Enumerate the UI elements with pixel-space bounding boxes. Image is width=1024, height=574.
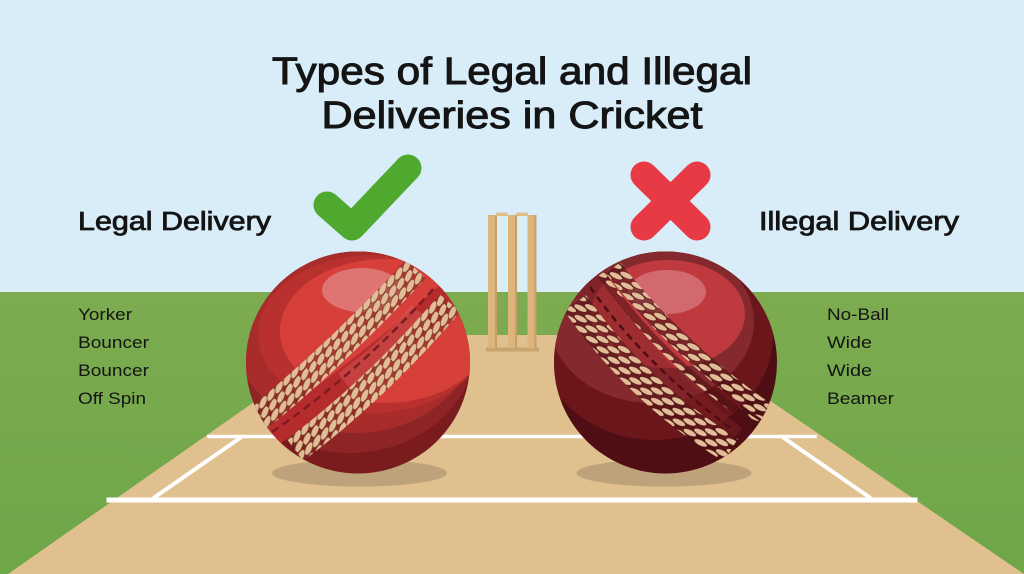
title (272, 51, 752, 137)
list: legal deliveries: Bouncer (78, 333, 149, 352)
ball highlight (322, 268, 402, 312)
seam stitching (259, 269, 416, 418)
icon: red cross (644, 175, 697, 227)
sky background (0, 0, 1024, 293)
list: illegal deliveries: No-Ball (827, 305, 889, 324)
shadow: legal ball (272, 460, 447, 486)
heading: illegal delivery: Illegal Delivery (759, 208, 959, 236)
list: illegal deliveries (827, 305, 894, 408)
icon: green check mark (327, 168, 408, 227)
heading: legal delivery: Legal Delivery (78, 208, 271, 236)
seam stitching (613, 268, 767, 412)
list: legal deliveries (78, 305, 149, 408)
centre seam (268, 286, 458, 436)
list: legal deliveries: Bouncer (78, 361, 149, 380)
list: legal deliveries: Off Spin (78, 389, 146, 408)
title: Deliveries in Cricket (322, 95, 703, 137)
list: legal deliveries: Yorker (78, 305, 132, 324)
title: Types of Legal and Illegal (272, 51, 752, 93)
crease lines (109, 436, 915, 500)
list: illegal deliveries: Beamer (827, 389, 894, 408)
list: illegal deliveries: Wide (827, 361, 872, 380)
illegal cricket ball (554, 252, 777, 474)
shadow: illegal ball (576, 460, 752, 486)
list: illegal deliveries: Wide (827, 333, 872, 352)
ball highlight (628, 270, 706, 314)
legal cricket ball (246, 252, 470, 474)
cricket pitch (8, 335, 1024, 574)
wickets (486, 212, 539, 352)
grass field (0, 292, 1024, 574)
centre seam (586, 284, 733, 440)
